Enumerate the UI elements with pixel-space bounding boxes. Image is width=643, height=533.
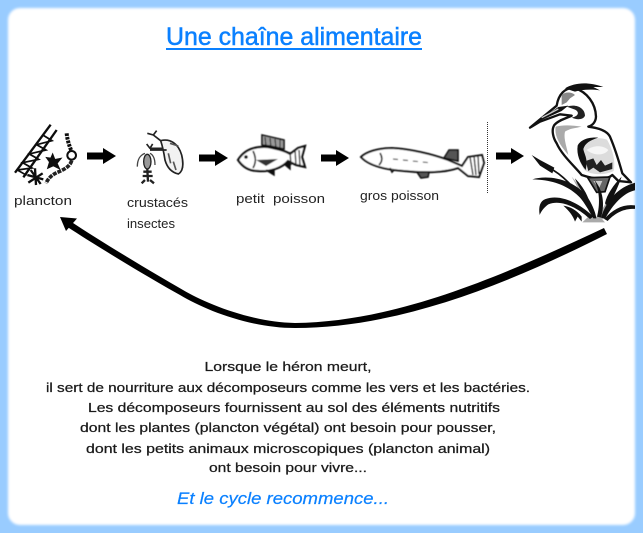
icon: héron et roseaux	[530, 83, 637, 222]
text block: explication: il sert de nourriture aux décomposeurs comme les vers et les bactéries.	[46, 380, 530, 395]
closing line: Et le cycle recommence...	[177, 489, 389, 508]
wing	[577, 138, 614, 174]
icon: gros poisson	[361, 148, 484, 178]
neck shading	[555, 125, 582, 155]
arrow 4	[496, 148, 524, 164]
label: plancton: plancton	[14, 193, 72, 208]
icon: petit poisson	[238, 135, 305, 175]
heron silhouette	[530, 88, 631, 182]
arrow 3	[321, 150, 349, 166]
label: gros poisson: gros poisson	[360, 188, 439, 203]
text block: explication: ont besoin pour vivre...	[209, 460, 367, 475]
text block: explication: Lorsque le héron meurt,	[204, 359, 372, 374]
black reed blades	[532, 155, 637, 222]
label: petit poisson: petit poisson	[236, 191, 325, 206]
text block: explication	[46, 359, 530, 475]
arrow 2	[199, 150, 228, 166]
title: Une chaîne alimentaire	[166, 23, 422, 51]
icon: crustacés et insectes	[137, 131, 183, 183]
dotted separator	[486, 122, 488, 193]
cattail	[532, 155, 554, 173]
icon: plancton	[15, 125, 76, 185]
head and beak markings	[541, 106, 568, 120]
label: crustacés insectes	[127, 195, 189, 231]
label: crustacés insectes: crustacés	[127, 195, 189, 210]
arrow 1	[87, 148, 116, 164]
text block: explication: Les décomposeurs fournissent au sol des éléments nutritifs	[88, 400, 501, 415]
label: crustacés insectes: insectes	[127, 216, 175, 231]
arrow: retour vers le plancton	[60, 217, 607, 328]
crest	[565, 83, 603, 92]
lower body	[588, 177, 610, 192]
text block: explication: dont les plantes (plancton végétal) ont besoin pour pousser,	[80, 420, 496, 435]
text block: explication: dont les petits animaux microscopiques (plancton animal)	[86, 441, 490, 456]
grey blades	[567, 177, 606, 222]
